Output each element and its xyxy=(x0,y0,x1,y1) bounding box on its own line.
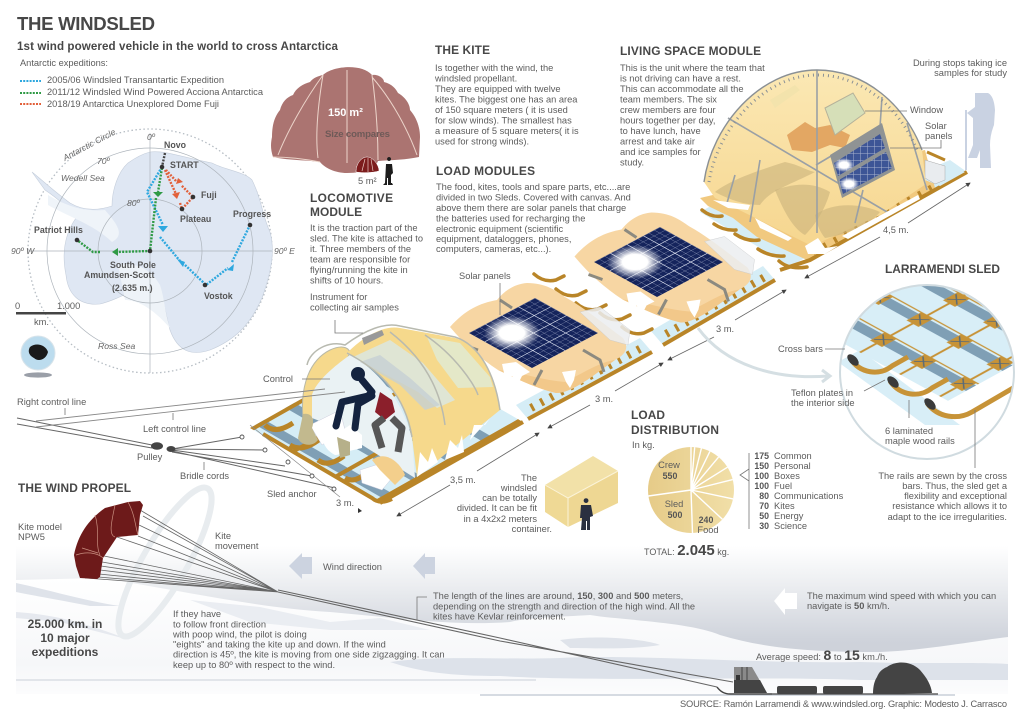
labels: control lines: Pulley xyxy=(137,452,163,462)
text: during stops: samples for study xyxy=(934,68,1007,78)
text: sled rails description: The rails are sewn by the cross xyxy=(878,471,1007,481)
kite size comparison xyxy=(271,67,420,186)
text block: living space module: is not driving can have a rest. xyxy=(620,74,741,84)
text: sled rails description: bars. Thus, the sled get a xyxy=(902,481,1008,491)
dimension lines: 4,5 m. xyxy=(883,225,909,235)
labels: sled detail: the interior side xyxy=(791,398,855,408)
illustration: living space module xyxy=(700,70,967,270)
text block: living space module: to have lunch, have xyxy=(620,126,701,136)
pie chart: Crew xyxy=(658,460,680,470)
illustration: kite and lines xyxy=(74,501,733,687)
text: sled rails description: resistance which allows it to xyxy=(892,501,1007,511)
legend: Antarctic expeditions: 2005/06 Windsled Transantartic Expedition xyxy=(47,75,224,85)
legend: Antarctic expeditions: 2011/12 Windsled Wind Powered Acciona Antarctica xyxy=(47,87,264,97)
text block: locomotive module: shifts of 10 hours. xyxy=(310,276,383,286)
text block: load modules: the batteries used for recharging the xyxy=(436,214,585,224)
labels: sled detail xyxy=(778,344,975,468)
map of Antarctica: Novo xyxy=(164,140,187,150)
text block: living space module: arrest and take air xyxy=(620,136,695,146)
title: THE WINDSLED xyxy=(17,13,155,34)
text: during stops: During stops taking ice xyxy=(913,58,1007,68)
dimension lines: 3 m. xyxy=(716,324,734,334)
text: length of lines: depending on the strength and direction of the high wind. All the xyxy=(433,602,695,612)
text block: load modules: equipment, dataloggers, phones, xyxy=(436,234,571,244)
pie chart: Food xyxy=(697,525,719,535)
labels: sled detail: Teflon plates in xyxy=(791,388,853,398)
source credit: SOURCE: Ramón Larramendi & www.windsled.org. Graphic: Modesto J. Carrasco xyxy=(680,699,1007,709)
text: front direction: "eights" and taking the kite up and down. If the wind xyxy=(173,640,386,650)
text: front direction: direction is 45º, the kite is moving from one side zigzagging. It can xyxy=(173,650,445,660)
text: windsled divided xyxy=(457,473,552,534)
load list: 150 xyxy=(754,461,769,471)
text block: load modules xyxy=(436,164,631,254)
load list: Kites xyxy=(774,501,795,511)
text block: the kite: Is together with the wind, the xyxy=(435,63,553,73)
text block: locomotive module: flying/running the kite in xyxy=(310,265,408,275)
labels: window and solar panels xyxy=(865,105,953,148)
pie chart: 240 xyxy=(699,515,713,525)
labels: control lines: Bridle cords xyxy=(180,471,229,481)
text block: locomotive module: team are responsible for xyxy=(310,254,410,264)
load list: Energy xyxy=(774,511,804,521)
illustration: locomotive module xyxy=(250,325,523,503)
kite size comparison: Size compares xyxy=(325,129,390,140)
text block: locomotive module xyxy=(310,191,423,312)
illustration: load sled 1 xyxy=(450,283,652,419)
labels: kite model and movement: Kite xyxy=(215,531,231,541)
text: front direction xyxy=(172,609,445,670)
load list: 100 xyxy=(754,471,769,481)
label: solar panels xyxy=(459,271,511,315)
labels: control lines: Control xyxy=(263,374,293,384)
text: windsled divided: The xyxy=(521,473,537,483)
load list: Communications xyxy=(774,491,844,501)
curved arrow to sled detail xyxy=(698,328,830,382)
map scale bar xyxy=(15,301,80,327)
text: sled rails description xyxy=(878,471,1008,522)
pie chart: Sled xyxy=(665,499,683,509)
text block: the kite: They are equipped with twelve xyxy=(435,84,561,94)
load distribution xyxy=(631,408,844,559)
text block: load modules: divided in two Sleds. Covered with canvas. And xyxy=(436,192,631,202)
solar panel 2 xyxy=(594,227,723,297)
text: windsled divided: container. xyxy=(512,524,552,534)
dimension lines: 3,5 m. xyxy=(450,475,476,485)
text block: locomotive module: It is the traction part of the xyxy=(310,223,418,233)
load list: Personal xyxy=(774,461,811,471)
load list: Fuel xyxy=(774,481,792,491)
text: front direction: with poop wind, the pilot is doing xyxy=(172,630,307,640)
text block: living space module: hours together per day, xyxy=(620,116,715,126)
labels: sled detail: maple wood rails xyxy=(885,436,955,446)
labels: window and solar panels: Window xyxy=(910,105,943,115)
labels: sled detail: 6 laminated xyxy=(885,426,933,436)
labels: kite model and movement: Kite model xyxy=(18,522,62,532)
kite size comparison: 5 m² xyxy=(358,176,377,186)
heading: In kg. xyxy=(632,440,655,450)
silhouette: windsled train xyxy=(717,662,938,694)
callout: 25.000 km xyxy=(28,617,102,659)
text block: load modules: The food, kites, tools and spare parts, etc....are xyxy=(436,182,630,192)
load list: 80 xyxy=(759,491,769,501)
text: windsled divided: windsled xyxy=(500,483,537,493)
map of Antarctica: South Pole xyxy=(110,260,156,270)
text block: living space module: This can accommodate all the xyxy=(620,84,744,94)
panel: snowy landscape background xyxy=(16,546,1008,702)
arrows: wind direction: Wind direction xyxy=(323,562,382,572)
map of Antarctica: (2.635 m.) xyxy=(112,283,153,293)
text block: load modules: computers, cameras, etc...). xyxy=(436,244,551,254)
text: windsled divided: can be totally xyxy=(482,493,537,503)
map of Antarctica xyxy=(11,127,295,373)
load list: 50 xyxy=(759,511,769,521)
text: windsled divided: in a 4x2x2 meters xyxy=(464,514,537,524)
larramendi sled detail circle xyxy=(839,284,1015,460)
text: sled rails description: adapt to the ice irregularities. xyxy=(888,512,1007,522)
callout: 25.000 km: expeditions xyxy=(32,645,99,659)
text block: load modules: above them there are solar panels that charge xyxy=(436,203,626,213)
map of Antarctica: Vostok xyxy=(204,291,233,301)
labels: sled detail: Cross bars xyxy=(778,344,823,354)
load list: Boxes xyxy=(774,471,800,481)
callout: 25.000 km: 25.000 km. in xyxy=(28,617,102,631)
arrows: wind direction xyxy=(289,553,435,579)
text block: locomotive module: LOCOMOTIVE xyxy=(310,191,393,205)
map of Antarctica: 90º E xyxy=(274,246,295,256)
map scale bar: 1.000 xyxy=(57,301,80,311)
text: average speed: Average speed: 8 to 15 km./h. xyxy=(756,647,888,663)
dimension lines: 3 m. xyxy=(336,498,354,508)
load list: Common xyxy=(774,451,812,461)
text: sled rails description: flexibility and exceptional xyxy=(904,491,1007,501)
labels: kite model and movement: NPW5 xyxy=(18,532,45,542)
labels: control lines: Sled anchor xyxy=(267,489,317,499)
map of Antarctica: Wedell Sea xyxy=(61,173,105,183)
text block: the kite: of 150 square meters ( it is used xyxy=(435,105,568,115)
text block: the kite: windsled propellant. xyxy=(434,74,517,84)
pie chart: 550 xyxy=(663,471,677,481)
person: seated crew red xyxy=(375,392,402,452)
load list: 70 xyxy=(759,501,769,511)
labels: kite model and movement xyxy=(18,522,259,551)
map of Antarctica: Fuji xyxy=(201,190,217,200)
map of Antarctica: Progress xyxy=(233,209,271,219)
text block: the kite: kites. The biggest one has an area xyxy=(435,94,578,104)
map of Antarctica: 90º W xyxy=(11,246,35,256)
labels: window and solar panels: panels xyxy=(925,131,953,141)
text: windsled divided: divided. It can be fit xyxy=(457,503,537,513)
text block: the kite: a measure of 5 square meters( it is xyxy=(435,126,579,136)
text block: load modules: LOAD MODULES xyxy=(436,164,535,178)
heading: larramendi sled: LARRAMENDI SLED xyxy=(885,262,1000,276)
illustration: load sled 2 xyxy=(574,212,775,345)
map of Antarctica: 0º xyxy=(147,132,156,142)
label: solar panels: Solar panels xyxy=(459,271,511,281)
labels: control lines xyxy=(17,320,363,499)
map scale bar: 0 xyxy=(15,301,20,311)
ghost kite movement ellipse xyxy=(103,477,227,647)
text block: load modules: electronic equipment (scientific xyxy=(436,224,563,234)
text: maximum wind speed: The maximum wind speed with which you can xyxy=(807,591,996,601)
legend: Antarctic expeditions: Antarctic expeditions: xyxy=(20,58,108,68)
legend: Antarctic expeditions xyxy=(20,58,264,109)
illustration: container box xyxy=(545,456,618,530)
dimension lines: 3 m. xyxy=(595,394,613,404)
load list: 175 xyxy=(754,451,769,461)
legend: Antarctic expeditions: 2018/19 Antarctica Unexplored Dome Fuji xyxy=(47,99,219,109)
load list: Science xyxy=(774,521,807,531)
load list xyxy=(754,451,844,531)
load list: 30 xyxy=(759,521,769,531)
text: maximum wind speed xyxy=(774,588,996,615)
labels: kite model and movement: movement xyxy=(215,541,259,551)
kite size comparison: 150 m² xyxy=(328,107,363,119)
icon: globe locator xyxy=(21,336,55,378)
text block: living space module: study. xyxy=(620,158,644,168)
heading: the wind propel: THE WIND PROPEL xyxy=(18,481,131,495)
dimension lines xyxy=(336,183,970,516)
map of Antarctica: 70º xyxy=(97,156,111,166)
callout: 25.000 km: 10 major xyxy=(40,631,90,645)
text block: living space module: This is the unit where the team that xyxy=(620,63,765,73)
map scale bar: km. xyxy=(34,317,49,327)
map of Antarctica: Amundsen-Scott xyxy=(84,270,154,280)
text: front direction: If they have xyxy=(173,609,221,619)
solar panel 1 xyxy=(469,298,598,368)
text block: living space module: team members. The six xyxy=(620,94,717,104)
map of Antarctica: Plateau xyxy=(180,214,211,224)
total: TOTAL: 2.045 kg. xyxy=(644,542,729,559)
heading: LOAD xyxy=(631,408,665,422)
text block: living space module xyxy=(620,44,765,168)
map of Antarctica: Patriot Hills xyxy=(34,225,83,235)
heading: DISTRIBUTION xyxy=(631,423,719,437)
text block: locomotive module: MODULE xyxy=(310,205,362,219)
illustration: sled runner tips between load sleds xyxy=(534,274,652,334)
pie chart xyxy=(648,447,734,535)
text: maximum wind speed: navigate is 50 km/h. xyxy=(807,601,890,611)
map of Antarctica: START xyxy=(170,160,199,170)
text block: locomotive module: it. Three members of the xyxy=(310,244,411,254)
labels: control lines: Right control line xyxy=(17,397,86,407)
text block: the kite: THE KITE xyxy=(435,43,490,57)
text block: locomotive module: sled. The kite is attached to xyxy=(310,234,423,244)
person: seated pilot navy xyxy=(336,370,372,428)
text block: living space module: LIVING SPACE MODULE xyxy=(620,44,761,58)
text: length of lines: The length of the lines are around, 150, 300 and 500 meters, xyxy=(433,591,683,601)
load list: 100 xyxy=(754,481,769,491)
text block: living space module: crew members are four xyxy=(620,105,716,115)
labels: control lines: Left control line xyxy=(143,424,206,434)
labels: window and solar panels: Solar xyxy=(925,121,947,131)
icon: person taking ice samples xyxy=(965,93,995,170)
text block: living space module: and ice samples for xyxy=(620,147,701,157)
text: length of lines xyxy=(417,591,695,622)
pie chart: 500 xyxy=(668,510,682,520)
map of Antarctica: 80º xyxy=(127,198,141,208)
text block: the kite xyxy=(434,43,579,146)
text: length of lines: kites have Kevlar reinforcement. xyxy=(433,612,566,622)
map of Antarctica: Antarctic Circle xyxy=(60,127,117,163)
map of Antarctica: Ross Sea xyxy=(98,341,135,351)
text: during stops xyxy=(913,58,1007,78)
text block: the kite: for slow winds). The smallest has xyxy=(435,116,572,126)
subtitle: 1st wind powered vehicle in the world to cross Antarctica xyxy=(17,40,339,53)
text block: locomotive module: collecting air samples xyxy=(310,302,399,312)
text block: locomotive module: Instrument for xyxy=(310,292,367,302)
text: front direction: to follow front direction xyxy=(173,620,266,630)
text block: the kite: used for strong winds). xyxy=(435,136,529,146)
text: front direction: keep up to 80º with respect to the wind. xyxy=(173,660,335,670)
heading xyxy=(631,408,719,450)
